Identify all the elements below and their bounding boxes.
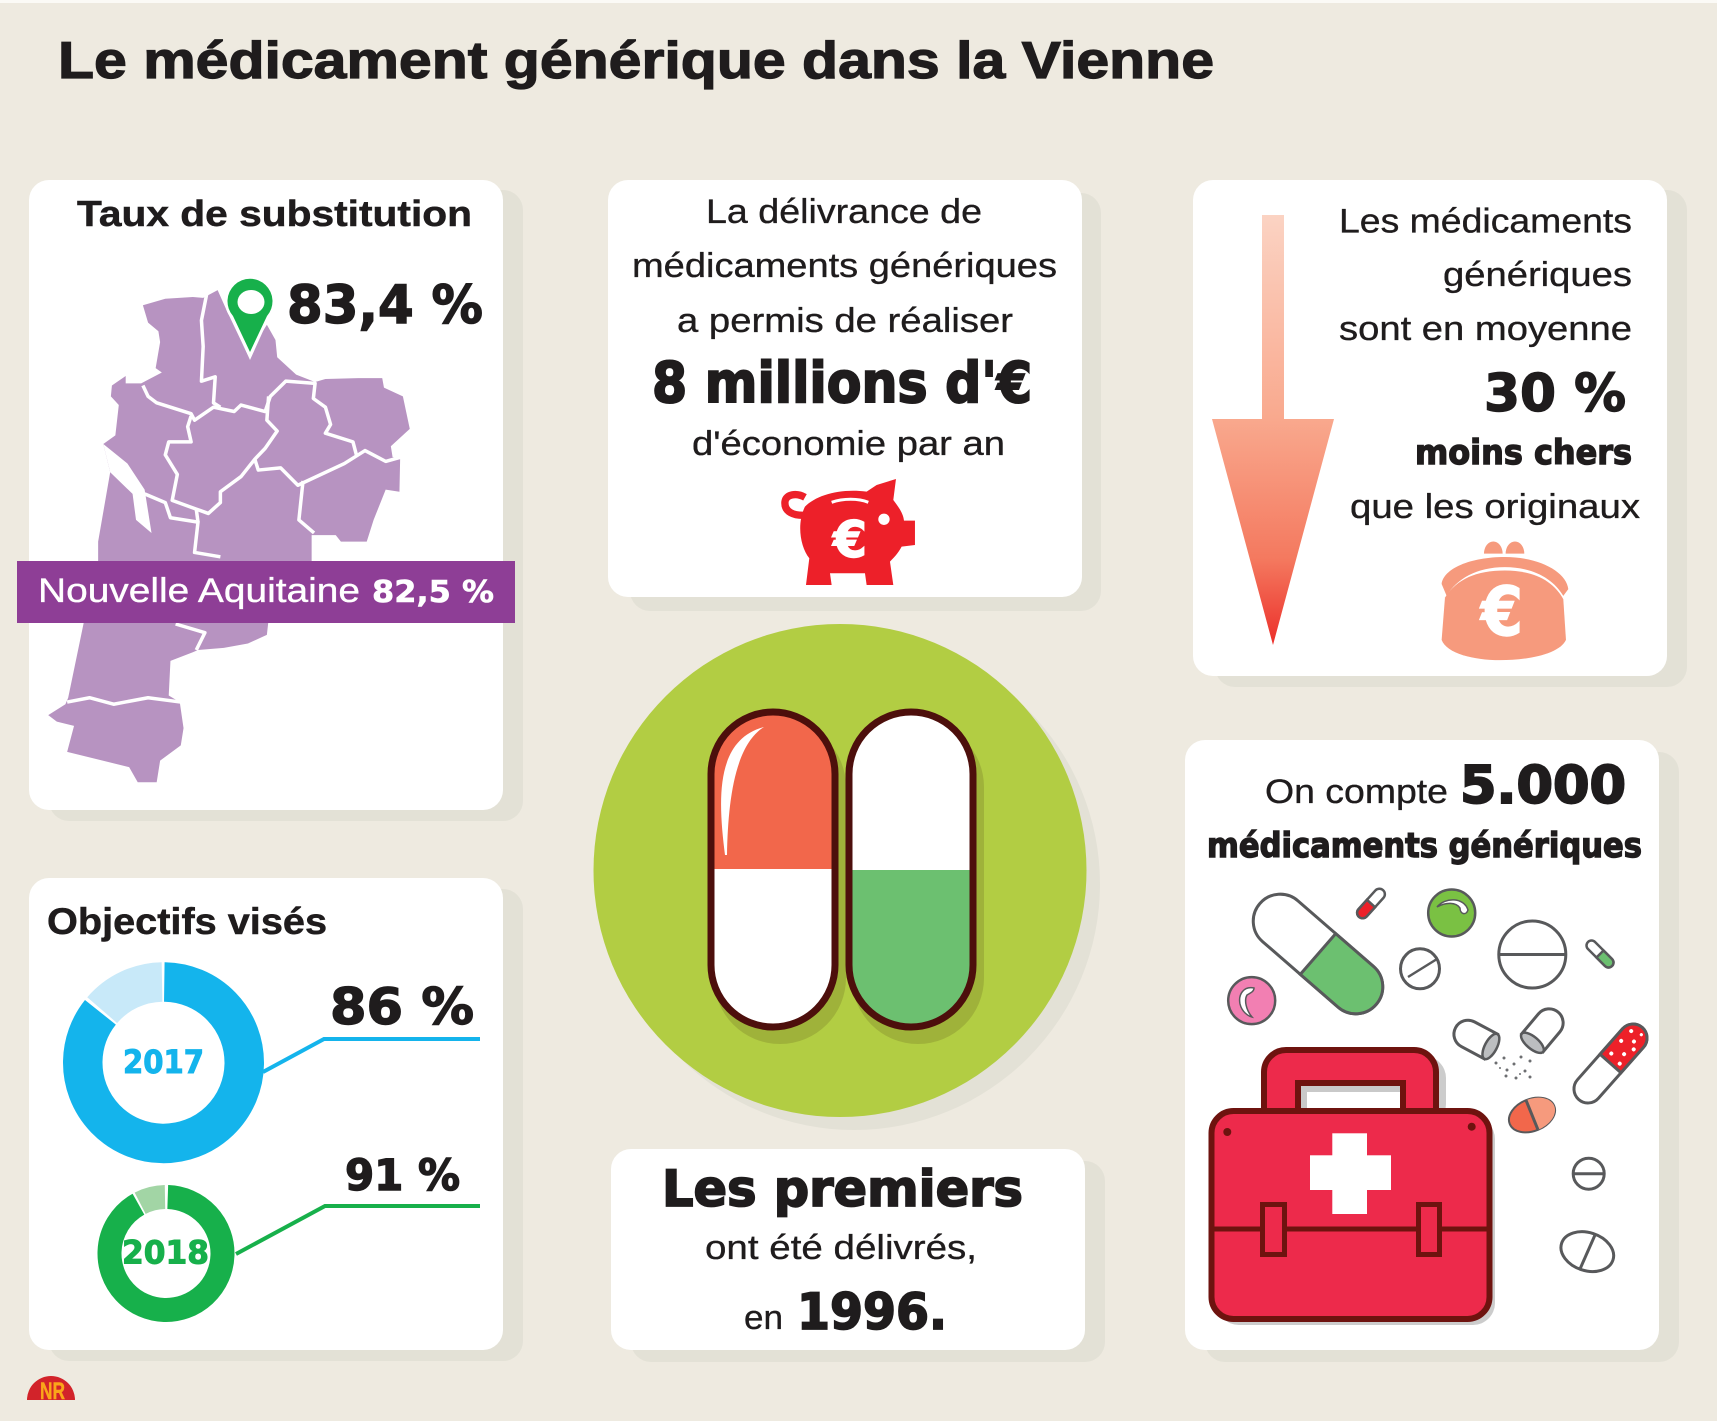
icon: open capsule left [1449, 1015, 1503, 1062]
text: d'économie par an: d'économie par an [692, 425, 1005, 463]
text block: la délivrance [632, 193, 1057, 340]
text: ont été délivrés: ont été délivrés, [705, 1229, 977, 1267]
icon: location pin [225, 277, 275, 360]
icon: small red capsule [1355, 886, 1387, 921]
donut chart: 2018 [90, 1178, 242, 1329]
icon: pink ball [1228, 977, 1275, 1024]
text block: les médicaments génériques: Les médicaments [1339, 202, 1632, 240]
icon: purse [1442, 541, 1568, 660]
logo: NR [27, 1376, 75, 1405]
icon: small round tablet [1573, 1158, 1604, 1189]
icon: big green capsule [1242, 883, 1394, 1025]
icon: large tablet [1499, 921, 1566, 988]
icon: oval tablet [1556, 1225, 1619, 1278]
text block: les médicaments génériques [1339, 202, 1632, 348]
icon: orange tablet [1504, 1091, 1560, 1139]
arrow: down gradient [1212, 215, 1334, 645]
text block: les médicaments génériques: génériques [1443, 256, 1632, 294]
icon: first aid kit [1212, 1050, 1495, 1325]
value: 86 %: 86 % [330, 978, 474, 1036]
banner: Nouvelle Aquitaine [17, 561, 515, 623]
illustration: green circle with two capsules [594, 624, 1100, 1130]
donut chart: 2017 [50, 949, 277, 1177]
text block: la délivrance: médicaments génériques [632, 247, 1057, 285]
panel: économies [608, 180, 1101, 611]
icon: spilled powder [1494, 1056, 1532, 1080]
text block: la délivrance: a permis de réaliser [677, 302, 1013, 340]
panel: taux de substitution [17, 180, 523, 821]
icon: purse: € [1479, 573, 1523, 652]
banner: Nouvelle Aquitaine: Nouvelle Aquitaine [38, 572, 360, 610]
heading: objectifs visés: Objectifs visés [47, 901, 327, 942]
panel: objectifs visés [29, 878, 523, 1361]
capsule: white and green [849, 712, 973, 1027]
banner: Nouvelle Aquitaine: 82,5 % [372, 575, 494, 610]
icon: piggy bank [785, 479, 915, 585]
text: moins chers: moins chers [1415, 433, 1632, 473]
value: 8 millions d'€: 8 millions d'€ [652, 351, 1032, 416]
icon: slashed tablet [1400, 949, 1440, 989]
title: Le médicament générique dans la Vienne [58, 32, 1214, 90]
leader line: 91 % [236, 1206, 480, 1254]
text block: la délivrance: La délivrance de [706, 193, 982, 231]
panel: 5.000 médicaments génériques [1185, 740, 1679, 1362]
text: que les originaux: que les originaux [1350, 488, 1640, 526]
text: les premiers: Les premiers [662, 1160, 1023, 1218]
capsule: red and white [711, 712, 835, 1027]
value: 1996: 1996. [797, 1283, 947, 1341]
value: 5.000: 5.000 [1460, 756, 1626, 816]
text: en: en [744, 1299, 783, 1337]
logo: NR: NR [40, 1378, 65, 1405]
icon: green ball [1428, 890, 1475, 936]
panel: les premiers en 1996 [611, 1149, 1105, 1362]
icon: open capsule right [1518, 1003, 1569, 1056]
value: 91 %: 91 % [345, 1151, 460, 1201]
map: Nouvelle-Aquitaine departments [48, 290, 410, 782]
donut chart: 2018: 2018 [122, 1234, 209, 1272]
icon: small green capsule [1584, 938, 1616, 970]
icon: speckled red capsule [1568, 1018, 1653, 1109]
value: 30 %: 30 % [1484, 364, 1626, 424]
donut chart: 2017: 2017 [123, 1043, 204, 1081]
panel: 30 % moins chers [1193, 180, 1687, 687]
capsule shadows [714, 721, 984, 1044]
heading: taux de substitution: Taux de substitution [77, 193, 472, 234]
text block: les médicaments génériques: sont en moyenne [1339, 310, 1632, 348]
icon: piggy bank: € [832, 511, 867, 569]
leader line: 86 % [263, 1039, 480, 1072]
value: 83,4 %: 83,4 % [287, 275, 483, 336]
text: médicaments génériques: médicaments génériques [1207, 826, 1642, 866]
text: on compte: On compte [1265, 773, 1448, 811]
